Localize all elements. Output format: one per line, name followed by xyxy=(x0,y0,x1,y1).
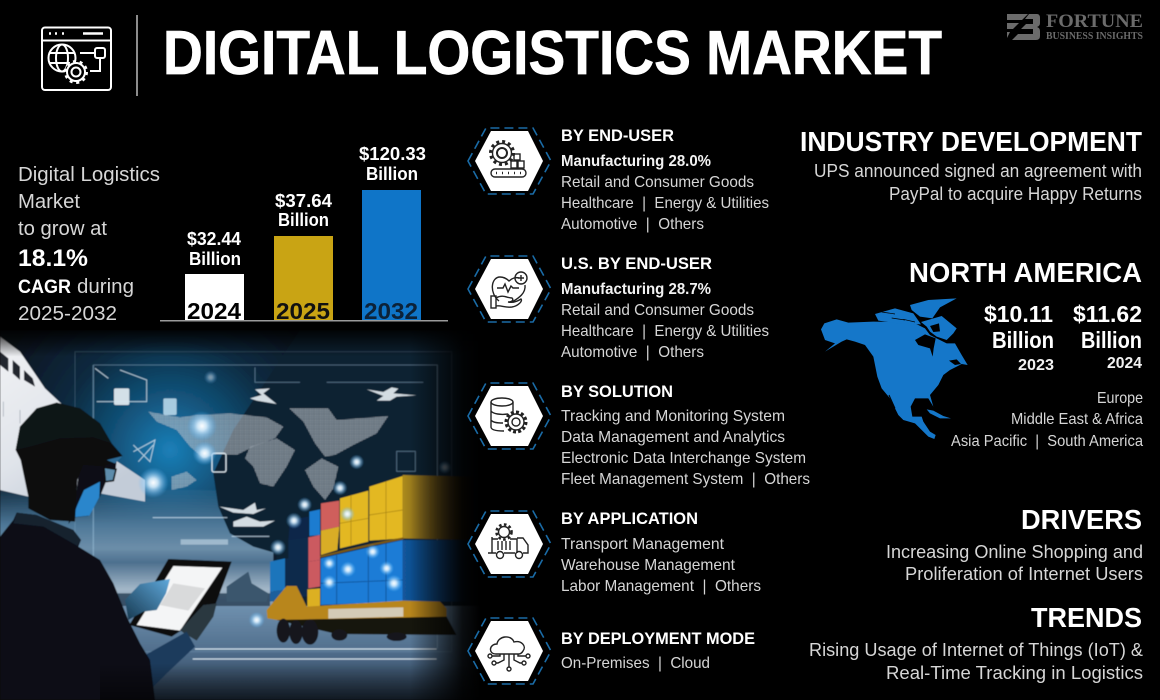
section: drivers: Proliferation of Internet Users xyxy=(905,564,1143,584)
section: U.S. by end-user: Manufacturing 28.7% xyxy=(561,281,711,298)
CAGR growth statement: CAGR xyxy=(18,277,71,298)
section: by solution: Fleet Management System | Others xyxy=(561,471,810,488)
stat: 2023 north america value: Billion xyxy=(992,327,1054,353)
section: by deployment mode: BY DEPLOYMENT MODE xyxy=(561,629,755,648)
section: drivers: Increasing Online Shopping and xyxy=(886,542,1143,562)
worker silhouette xyxy=(0,403,195,700)
map: North America xyxy=(821,298,968,439)
glowing nodes xyxy=(138,371,452,628)
section: industry development: INDUSTRY DEVELOPMENT xyxy=(800,126,1142,157)
header divider xyxy=(136,15,138,96)
bar chart: market size xyxy=(160,144,448,324)
section: by solution: Electronic Data Interchange System xyxy=(561,450,806,467)
stat: 2024 north america value: Billion xyxy=(1081,327,1142,353)
other regions list: Asia Pacific | South America xyxy=(951,433,1143,450)
section: by end-user: Manufacturing 28.0% xyxy=(561,153,711,170)
title: DIGITAL LOGISTICS MARKET xyxy=(163,19,942,88)
icon: deployment cloud network xyxy=(468,618,551,684)
bar 2025 xyxy=(274,191,333,324)
section: trends: Rising Usage of Internet of Things (IoT) & xyxy=(809,640,1143,660)
section: by solution: Data Management and Analytics xyxy=(561,429,785,446)
section: U.S. by end-user: Automotive | Others xyxy=(561,344,704,361)
bar 2032 xyxy=(359,144,426,324)
icon: solution database and gear xyxy=(468,383,551,449)
bar 2024: Billion xyxy=(189,249,241,269)
stat: 2023 north america value: $10.11 xyxy=(984,301,1053,327)
section: by application: Transport Management xyxy=(561,536,725,553)
CAGR growth statement: 2025-2032 xyxy=(18,303,117,325)
header icon: browser window with globe and gear xyxy=(42,28,111,90)
serial text band xyxy=(181,539,228,545)
section: trends: Real-Time Tracking in Logistics xyxy=(886,663,1143,683)
section: by deployment mode xyxy=(561,629,755,672)
icon: application truck and gear xyxy=(468,511,551,577)
bar 2025: $37.64 xyxy=(275,191,332,211)
icon: U.S. end-user heart in hand xyxy=(468,256,551,322)
fades xyxy=(410,327,480,700)
section: U.S. by end-user: U.S. BY END-USER xyxy=(561,254,712,273)
stat: 2024 north america value: $11.62 xyxy=(1073,301,1142,327)
other regions list: Middle East & Africa xyxy=(1011,411,1143,428)
CAGR growth statement: 18.1% xyxy=(18,245,88,272)
bar 2025: 2025 xyxy=(276,298,330,324)
section: U.S. by end-user: Retail and Consumer Goods xyxy=(561,302,754,319)
section: by end-user: BY END-USER xyxy=(561,126,674,145)
bar 2025: Billion xyxy=(278,210,329,230)
section: by application: Warehouse Management xyxy=(561,557,736,574)
stat: 2023 north america value: 2023 xyxy=(1018,357,1054,374)
bar 2024: $32.44 xyxy=(187,229,241,249)
section: by deployment mode: On-Premises | Cloud xyxy=(561,655,710,672)
photo: logistics worker with tablet, world map and containers xyxy=(0,327,480,700)
section: by end-user: Automotive | Others xyxy=(561,216,704,233)
tablet xyxy=(125,559,232,641)
section: industry development: UPS announced signed an agreement with xyxy=(814,161,1142,181)
CAGR growth statement: during xyxy=(77,276,134,298)
logo: Fortune Business Insights: FORTUNE xyxy=(1046,11,1143,32)
icon: by end-user gear and conveyor xyxy=(468,128,551,194)
airplane xyxy=(0,337,145,502)
section: by application xyxy=(561,509,761,595)
logo: Fortune Business Insights: BUSINESS INSIGHTS xyxy=(1046,31,1143,42)
section: by solution xyxy=(561,382,810,488)
logo: Fortune Business Insights xyxy=(1007,11,1143,42)
CAGR growth statement: to grow at xyxy=(18,218,107,240)
harbor skyline xyxy=(117,593,270,606)
transport glyphs xyxy=(114,387,417,527)
section: north america heading: NORTH AMERICA xyxy=(909,257,1142,288)
section: industry development xyxy=(800,126,1142,204)
hands xyxy=(125,579,170,620)
dotted world map xyxy=(148,408,388,500)
section: by solution: Tracking and Monitoring System xyxy=(561,408,785,425)
section: U.S. by end-user xyxy=(561,254,769,361)
section: drivers xyxy=(886,504,1143,584)
ground light lines xyxy=(193,649,437,659)
CAGR growth statement: Digital Logistics xyxy=(18,164,160,186)
other regions list: Europe xyxy=(1097,390,1143,407)
section: by application: BY APPLICATION xyxy=(561,509,698,528)
bar 2032: Billion xyxy=(366,164,418,184)
stat: 2023 north america value xyxy=(984,301,1054,374)
section: industry development: PayPal to acquire Happy Returns xyxy=(889,184,1142,204)
bar 2024 xyxy=(185,229,244,324)
CAGR growth statement: Market xyxy=(18,191,80,213)
trailer xyxy=(267,586,447,620)
containers xyxy=(267,475,473,645)
frame lines xyxy=(75,352,452,652)
section: by solution: BY SOLUTION xyxy=(561,382,673,401)
section: drivers: DRIVERS xyxy=(1021,504,1142,535)
CAGR growth statement xyxy=(18,164,160,325)
bar 2032: $120.33 xyxy=(359,144,426,164)
section: U.S. by end-user: Healthcare | Energy & Utilities xyxy=(561,323,769,340)
section: by end-user xyxy=(561,126,769,233)
bar 2024: 2024 xyxy=(187,298,241,324)
stat: 2024 north america value: 2024 xyxy=(1107,355,1142,372)
section: trends: TRENDS xyxy=(1031,602,1142,633)
bar 2032: 2032 xyxy=(364,298,418,324)
section: by application: Labor Management | Others xyxy=(561,578,761,595)
section: by end-user: Retail and Consumer Goods xyxy=(561,174,754,191)
other regions list xyxy=(951,390,1143,450)
section: trends xyxy=(809,602,1143,683)
stat: 2024 north america value xyxy=(1073,301,1142,372)
section: by end-user: Healthcare | Energy & Utilities xyxy=(561,195,769,212)
